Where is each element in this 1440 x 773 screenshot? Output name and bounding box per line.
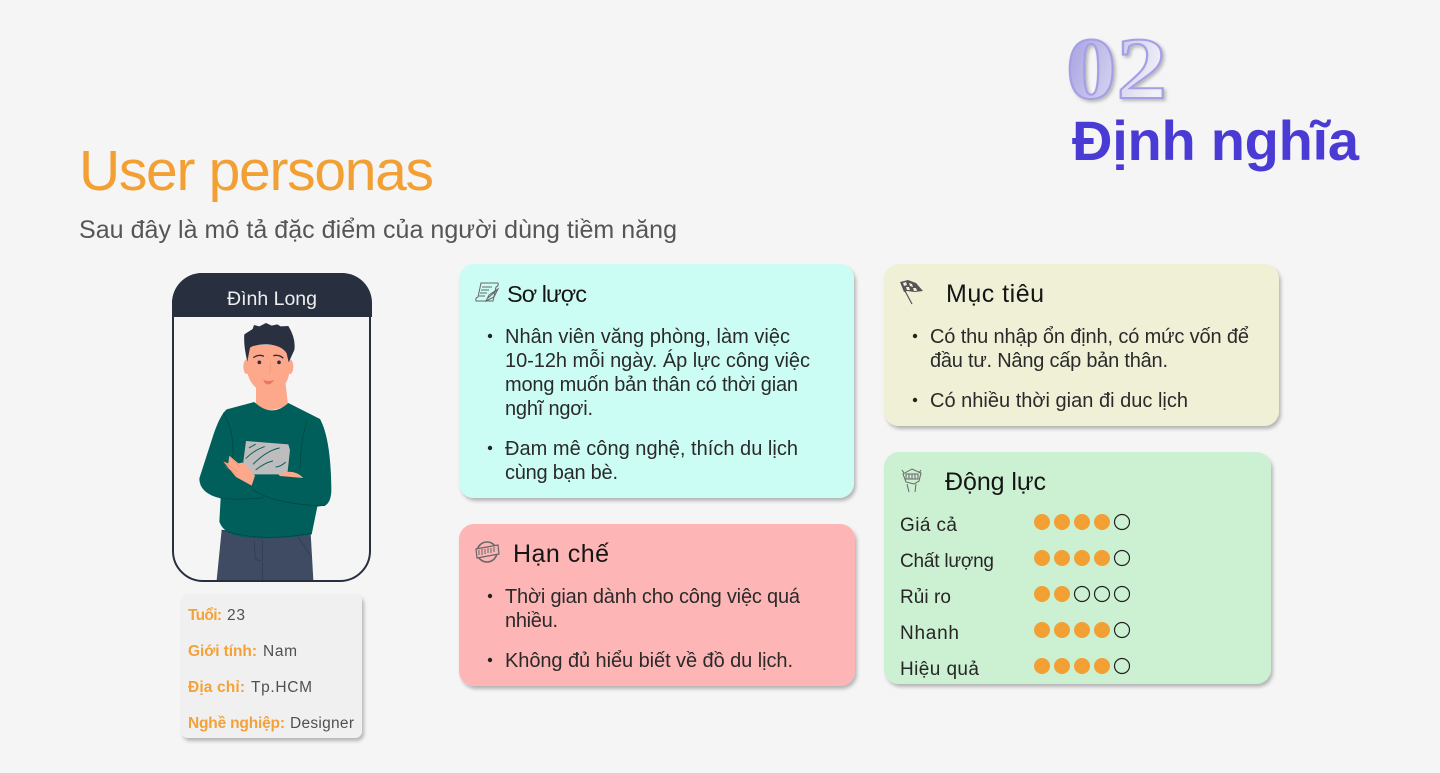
heading: Mục tiêu: Mục tiêu (946, 280, 1044, 308)
gender: Nam (263, 643, 297, 660)
bullet list: 10-12h mỗi ngày. Áp lực công việc (505, 349, 810, 372)
persona card (172, 273, 372, 581)
occupation: Designer (290, 715, 354, 732)
icon: checkered flag (900, 280, 923, 304)
persona details (181, 594, 362, 738)
icon: scroll and quill (476, 283, 498, 301)
icon: limited stamp (476, 542, 499, 562)
bullet list: Nhân viên văng phòng, làm việc (505, 326, 790, 348)
panel: Mục tiêu (884, 264, 1279, 426)
rating: Nhanh (900, 622, 1130, 644)
title: User personas (79, 139, 434, 203)
rating: Hiệu quả (900, 658, 1130, 680)
bullet list: nghĩ ngơi. (505, 398, 593, 420)
persona name header: Đình Long (227, 288, 317, 310)
bullet list (488, 326, 810, 484)
bullet list: Có thu nhập ổn định, có mức vốn để (930, 326, 1249, 348)
bullet list: Có nhiều thời gian đi duc lịch (930, 390, 1188, 412)
bullet list: mong muốn bản thân có thời gian (505, 374, 798, 396)
address (188, 679, 312, 696)
rating: Hiệu quả: Hiệu quả (900, 659, 979, 680)
bullet list: nhiều. (505, 610, 558, 632)
rating: Giá cả: Giá cả (900, 515, 957, 536)
rating: Rủi ro (900, 586, 1130, 608)
subtitle: Sau đây là mô tả đặc điểm của người dùng tiềm năng (79, 216, 677, 244)
heading: Động lực: Động lực (945, 468, 1046, 496)
icon: raised fist (902, 469, 921, 492)
occupation: Nghề nghiệp: (188, 715, 285, 732)
bullet list (488, 586, 801, 672)
bullet list: đầu tư. Nâng cấp bản thân. (930, 350, 1168, 372)
bullet list: Thời gian dành cho công việc quá (505, 586, 801, 608)
bullet list: Không đủ hiểu biết về đồ du lịch. (505, 650, 793, 672)
rating: Chất lượng (900, 550, 1130, 572)
persona name header (172, 273, 372, 317)
gender: Giới tính: (188, 643, 257, 660)
section number 02: 02 (1066, 21, 1167, 118)
age: Tuổi: (188, 607, 222, 624)
heading: Hạn chế: Hạn chế (513, 540, 609, 568)
rating: Nhanh: Nhanh (900, 623, 959, 644)
rating: Chất lượng: Chất lượng (900, 551, 994, 572)
section heading: Định nghĩa (1072, 109, 1360, 172)
address: Địa chỉ: (188, 679, 245, 696)
bullet list (913, 326, 1249, 412)
rating: Giá cả (900, 514, 1130, 536)
bullet list: Đam mê công nghệ, thích du lịch (505, 438, 798, 460)
rating: Rủi ro: Rủi ro (900, 587, 951, 608)
panel: Sơ lược (459, 264, 854, 498)
heading: Sơ lược: Sơ lược (507, 281, 587, 307)
illustration: man holding a tablet (199, 323, 331, 580)
age (188, 607, 245, 624)
occupation (188, 715, 354, 732)
age: 23 (227, 607, 245, 624)
panel: Động lực (884, 452, 1271, 684)
address: Tp.HCM (251, 679, 312, 696)
bullet list: cùng bạn bè. (505, 462, 618, 484)
panel: Hạn chế (459, 524, 855, 686)
gender (188, 643, 297, 660)
